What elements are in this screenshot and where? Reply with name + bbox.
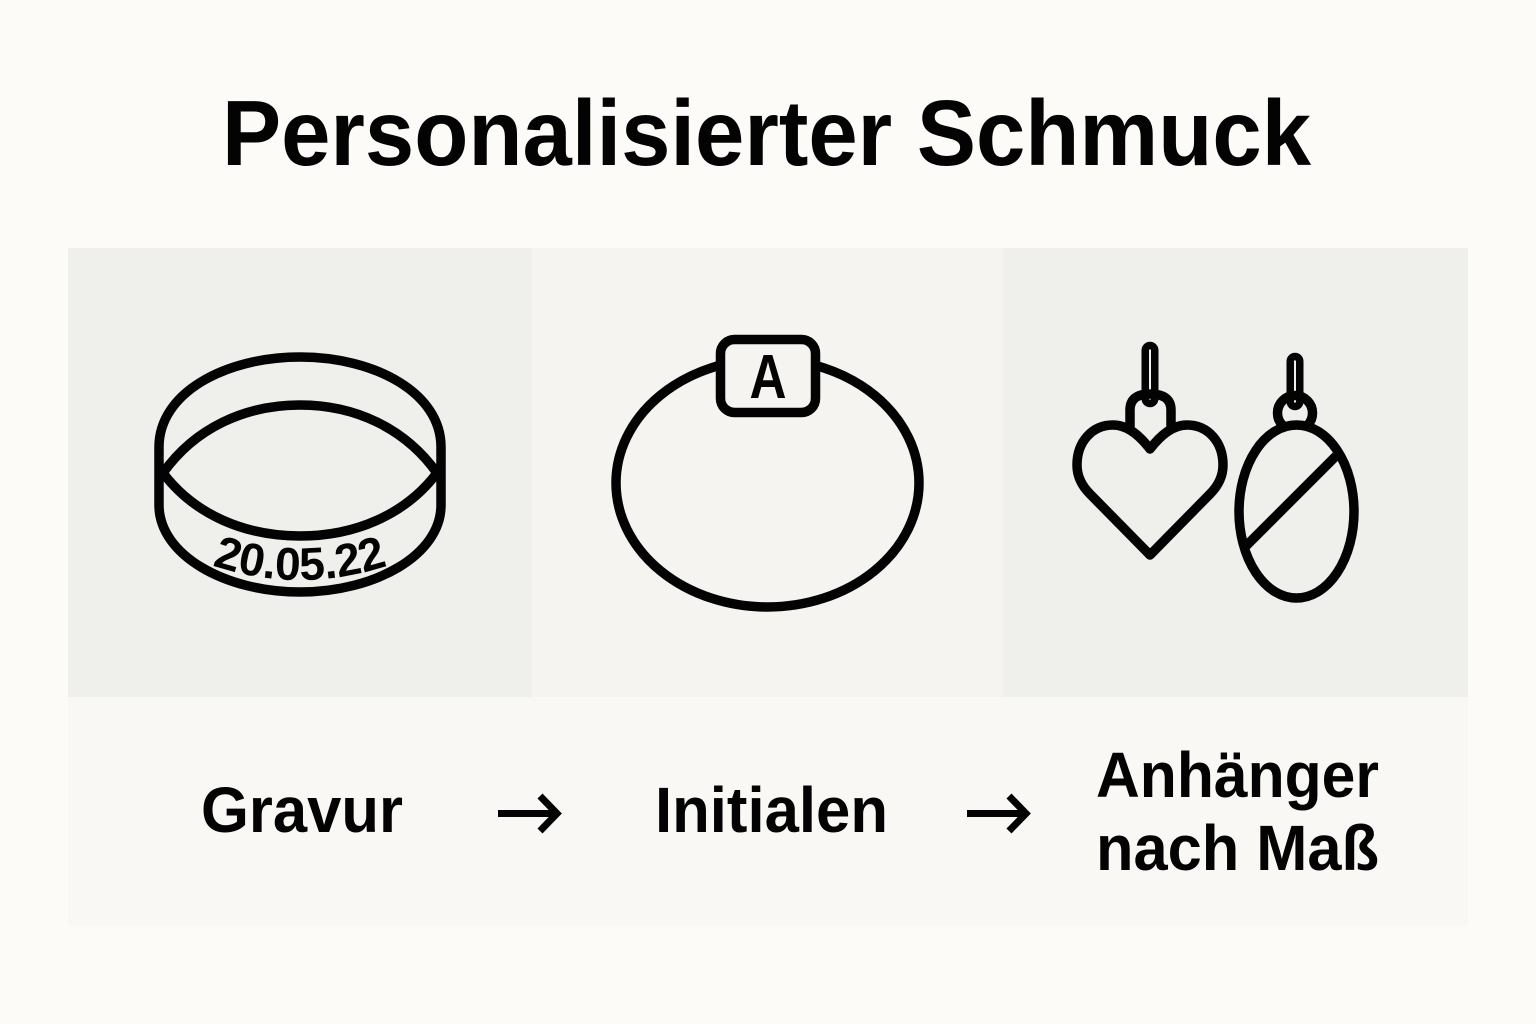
pendant initial: A bbox=[750, 343, 786, 412]
title: Personalisierter Schmuck bbox=[222, 81, 1311, 185]
panel: icon row bbox=[68, 248, 1468, 697]
label: Initialen: Initialen bbox=[655, 774, 888, 846]
icon: heart and oval pendants bbox=[1077, 346, 1354, 598]
arrow: Gravur to Initialen bbox=[498, 796, 557, 831]
label: Anhänger nach Maß: nach Maß bbox=[1096, 812, 1379, 884]
engraving date: 20.05.22 bbox=[214, 538, 386, 580]
icon: engraved ring bbox=[154, 352, 446, 597]
label: Gravur: Gravur bbox=[201, 774, 403, 846]
panel: label row bbox=[68, 697, 1468, 926]
icon: necklace with initial pendant bbox=[616, 340, 919, 607]
label: Anhänger nach Maß bbox=[1096, 739, 1379, 884]
arrow: Initialen to Anhänger bbox=[967, 796, 1026, 831]
label: Anhänger nach Maß: Anhänger bbox=[1096, 739, 1379, 811]
